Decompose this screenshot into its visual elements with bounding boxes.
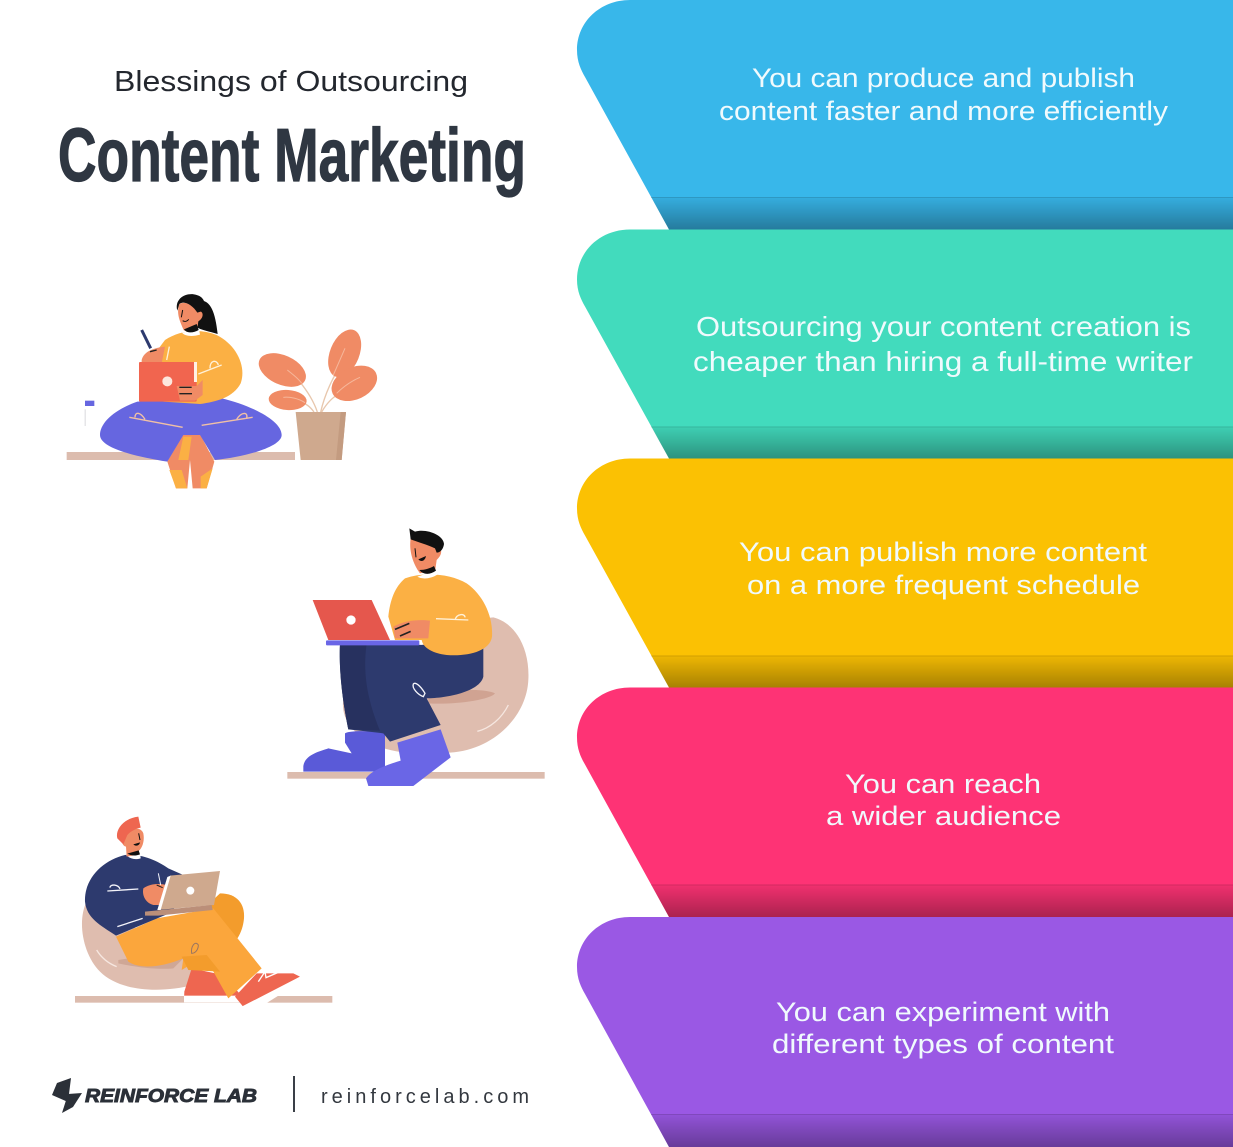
beanbag xyxy=(343,617,528,754)
illustration: man on beanbag with red laptop xyxy=(287,528,545,786)
text: wider audience xyxy=(826,769,1061,831)
text: frequent schedule: You can publish more content xyxy=(739,537,1148,567)
panel: wider audience xyxy=(577,688,1233,917)
panel: frequent schedule xyxy=(577,458,1233,688)
text: faster publishing: You can produce and publish xyxy=(752,63,1135,93)
illustration: woman with tablet and plant xyxy=(67,294,383,488)
icon: potted plant xyxy=(254,325,383,460)
text: cheaper than hiring xyxy=(693,311,1193,377)
text: frequent schedule: on a more frequent schedule xyxy=(747,570,1140,600)
icon: logo mark xyxy=(52,1078,82,1113)
man figure xyxy=(85,817,301,1016)
illustration: man on beanbag with tan laptop xyxy=(75,817,332,1016)
divider xyxy=(293,1076,295,1112)
text: frequent schedule xyxy=(739,537,1148,600)
panel: faster publishing xyxy=(577,0,1233,230)
man figure xyxy=(303,528,492,786)
logo: Reinforce Lab xyxy=(52,1078,257,1113)
text: wider audience: You can reach xyxy=(845,769,1041,799)
text: different content types: different types of content xyxy=(772,1029,1115,1059)
text: different content types xyxy=(772,997,1115,1059)
text: faster publishing: content faster and more efficiently xyxy=(719,96,1169,126)
beanbag xyxy=(82,902,200,990)
text: cheaper than hiring: Outsourcing your content creation is xyxy=(696,311,1191,342)
panel: different content types xyxy=(577,917,1233,1147)
woman figure xyxy=(100,294,282,488)
website url: reinforcelab.com xyxy=(321,1086,529,1108)
heading: Blessings of Outsourcing: Blessings of Outsourcing xyxy=(114,66,468,98)
logo: Reinforce Lab: REINFORCE LAB xyxy=(85,1085,257,1106)
text: wider audience: a wider audience xyxy=(826,801,1061,831)
text: faster publishing xyxy=(719,63,1169,126)
panel: cheaper than hiring xyxy=(577,230,1233,458)
text: cheaper than hiring: cheaper than hiring a full-time writer xyxy=(693,346,1193,377)
title: Content Marketing: Content Marketing xyxy=(58,113,526,197)
text: different content types: You can experiment with xyxy=(776,997,1110,1027)
